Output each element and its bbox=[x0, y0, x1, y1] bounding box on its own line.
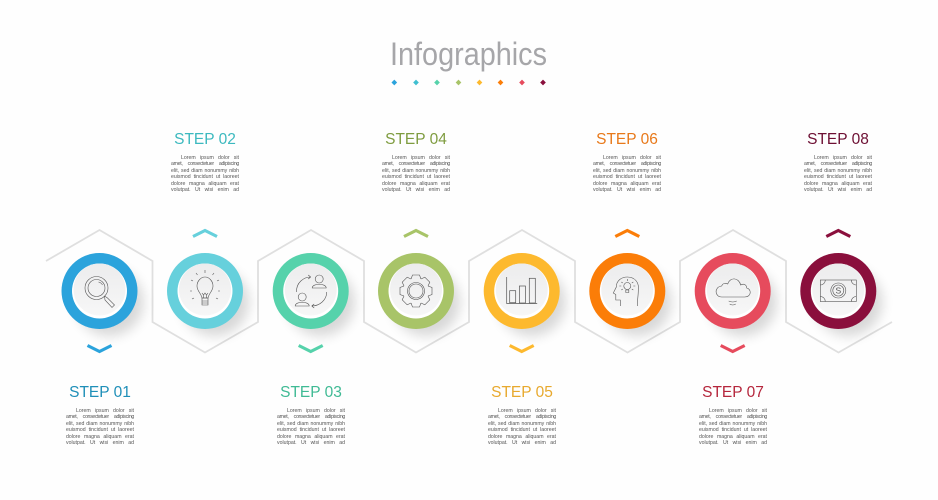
text block: step 01 bbox=[66, 384, 134, 446]
step 6 circle: head with idea bbox=[589, 253, 671, 336]
chevron step 4 bbox=[404, 230, 428, 236]
text block: step 01: euismod tincidunt ut laoreet bbox=[66, 427, 134, 433]
chevron step 2 bbox=[193, 230, 217, 236]
text block: step 03 bbox=[277, 384, 345, 446]
text block: step 08: dolore magna aliquam erat bbox=[804, 181, 872, 187]
text block: step 06: Lorem ipsum dolor sit bbox=[603, 155, 661, 161]
text block: step 01: STEP 01 bbox=[69, 384, 131, 401]
icon: lightbulb bbox=[190, 270, 220, 305]
text block: step 08 bbox=[804, 131, 872, 193]
text block: step 08: Lorem ipsum dolor sit bbox=[814, 155, 872, 161]
chevron step 3 bbox=[299, 346, 323, 352]
text block: step 02: euismod tincidunt ut laoreet bbox=[171, 174, 239, 180]
step 3 circle: people exchange bbox=[273, 253, 355, 336]
text block: step 01: elit, sed diam nonummy nibh bbox=[66, 421, 134, 427]
step 5 circle: bar chart bbox=[484, 253, 566, 336]
text block: step 01: amet, consectetuer adipiscing bbox=[66, 414, 134, 420]
text block: step 07: dolore magna aliquam erat bbox=[699, 434, 767, 440]
text block: step 08: euismod tincidunt ut laoreet bbox=[804, 174, 872, 180]
text block: step 06: volutpat. Ut wisi enim ad bbox=[593, 187, 661, 193]
text block: step 04: volutpat. Ut wisi enim ad bbox=[382, 187, 450, 193]
text block: step 02: STEP 02 bbox=[174, 131, 236, 148]
text block: step 04: amet, consectetuer adipiscing bbox=[382, 161, 450, 167]
text block: step 01: dolore magna aliquam erat bbox=[66, 434, 134, 440]
text block: step 03: dolore magna aliquam erat bbox=[277, 434, 345, 440]
text block: step 07: euismod tincidunt ut laoreet bbox=[699, 427, 767, 433]
text block: step 03: volutpat. Ut wisi enim ad bbox=[277, 440, 345, 446]
icon: people exchange bbox=[295, 275, 327, 308]
text block: step 05 bbox=[488, 384, 556, 446]
text block: step 06: amet, consectetuer adipiscing bbox=[593, 161, 661, 167]
colored diamond row bbox=[391, 80, 546, 85]
text block: step 03: STEP 03 bbox=[280, 384, 342, 401]
step 7 circle: cloud bbox=[695, 253, 777, 336]
text block: step 02: elit, sed diam nonummy nibh bbox=[171, 168, 239, 174]
text block: step 06 bbox=[593, 131, 661, 193]
chevron step 1 bbox=[88, 346, 112, 352]
icon: bar chart bbox=[507, 277, 537, 304]
text block: step 05: volutpat. Ut wisi enim ad bbox=[488, 440, 556, 446]
text block: step 03: amet, consectetuer adipiscing bbox=[277, 414, 345, 420]
hexagon connector line bbox=[46, 230, 892, 352]
text block: step 05: amet, consectetuer adipiscing bbox=[488, 414, 556, 420]
text block: step 01: volutpat. Ut wisi enim ad bbox=[66, 440, 134, 446]
text block: step 07: STEP 07 bbox=[702, 384, 764, 401]
text block: step 02: Lorem ipsum dolor sit bbox=[181, 155, 239, 161]
text block: step 04: dolore magna aliquam erat bbox=[382, 181, 450, 187]
text block: step 07: amet, consectetuer adipiscing bbox=[699, 414, 767, 420]
text block: step 03: euismod tincidunt ut laoreet bbox=[277, 427, 345, 433]
text block: step 03: Lorem ipsum dolor sit bbox=[287, 408, 345, 414]
text block: step 02: amet, consectetuer adipiscing bbox=[171, 161, 239, 167]
chevron step 5 bbox=[510, 346, 534, 352]
text block: step 08: volutpat. Ut wisi enim ad bbox=[804, 187, 872, 193]
text block: step 08: STEP 08 bbox=[807, 131, 869, 148]
text block: step 08: amet, consectetuer adipiscing bbox=[804, 161, 872, 167]
text block: step 06: elit, sed diam nonummy nibh bbox=[593, 168, 661, 174]
text block: step 01: Lorem ipsum dolor sit bbox=[76, 408, 134, 414]
text block: step 04: STEP 04 bbox=[385, 131, 447, 148]
icon: magnifier bbox=[85, 276, 114, 308]
chevron step 7 bbox=[721, 346, 745, 352]
text block: step 04: elit, sed diam nonummy nibh bbox=[382, 168, 450, 174]
text block: step 02: volutpat. Ut wisi enim ad bbox=[171, 187, 239, 193]
step 1 circle: magnifier bbox=[62, 253, 144, 336]
text block: step 06: dolore magna aliquam erat bbox=[593, 181, 661, 187]
step 8 circle: banknote bbox=[800, 253, 882, 336]
chevron step 8 bbox=[826, 230, 850, 236]
text block: step 02: dolore magna aliquam erat bbox=[171, 181, 239, 187]
text block: step 05: dolore magna aliquam erat bbox=[488, 434, 556, 440]
text block: step 04: euismod tincidunt ut laoreet bbox=[382, 174, 450, 180]
text block: step 07: Lorem ipsum dolor sit bbox=[709, 408, 767, 414]
title: Infographics bbox=[390, 36, 547, 72]
text block: step 03: elit, sed diam nonummy nibh bbox=[277, 421, 345, 427]
text block: step 05: Lorem ipsum dolor sit bbox=[498, 408, 556, 414]
text block: step 06: euismod tincidunt ut laoreet bbox=[593, 174, 661, 180]
text block: step 08: elit, sed diam nonummy nibh bbox=[804, 168, 872, 174]
text block: step 02 bbox=[171, 131, 239, 193]
text block: step 04: Lorem ipsum dolor sit bbox=[392, 155, 450, 161]
icon: head with idea bbox=[613, 277, 638, 306]
text block: step 07: volutpat. Ut wisi enim ad bbox=[699, 440, 767, 446]
text block: step 06: STEP 06 bbox=[596, 131, 658, 148]
text block: step 05: euismod tincidunt ut laoreet bbox=[488, 427, 556, 433]
text block: step 05: elit, sed diam nonummy nibh bbox=[488, 421, 556, 427]
text block: step 05: STEP 05 bbox=[491, 384, 553, 401]
step 4 circle: gear bbox=[378, 253, 460, 336]
icon: banknote: S bbox=[835, 286, 841, 296]
text block: step 04 bbox=[382, 131, 450, 193]
icon: gear bbox=[400, 275, 432, 307]
icon: cloud bbox=[716, 279, 750, 305]
step 2 circle: lightbulb bbox=[167, 253, 249, 336]
text block: step 07: elit, sed diam nonummy nibh bbox=[699, 421, 767, 427]
chevron step 6 bbox=[615, 230, 639, 236]
text block: step 07 bbox=[699, 384, 767, 446]
